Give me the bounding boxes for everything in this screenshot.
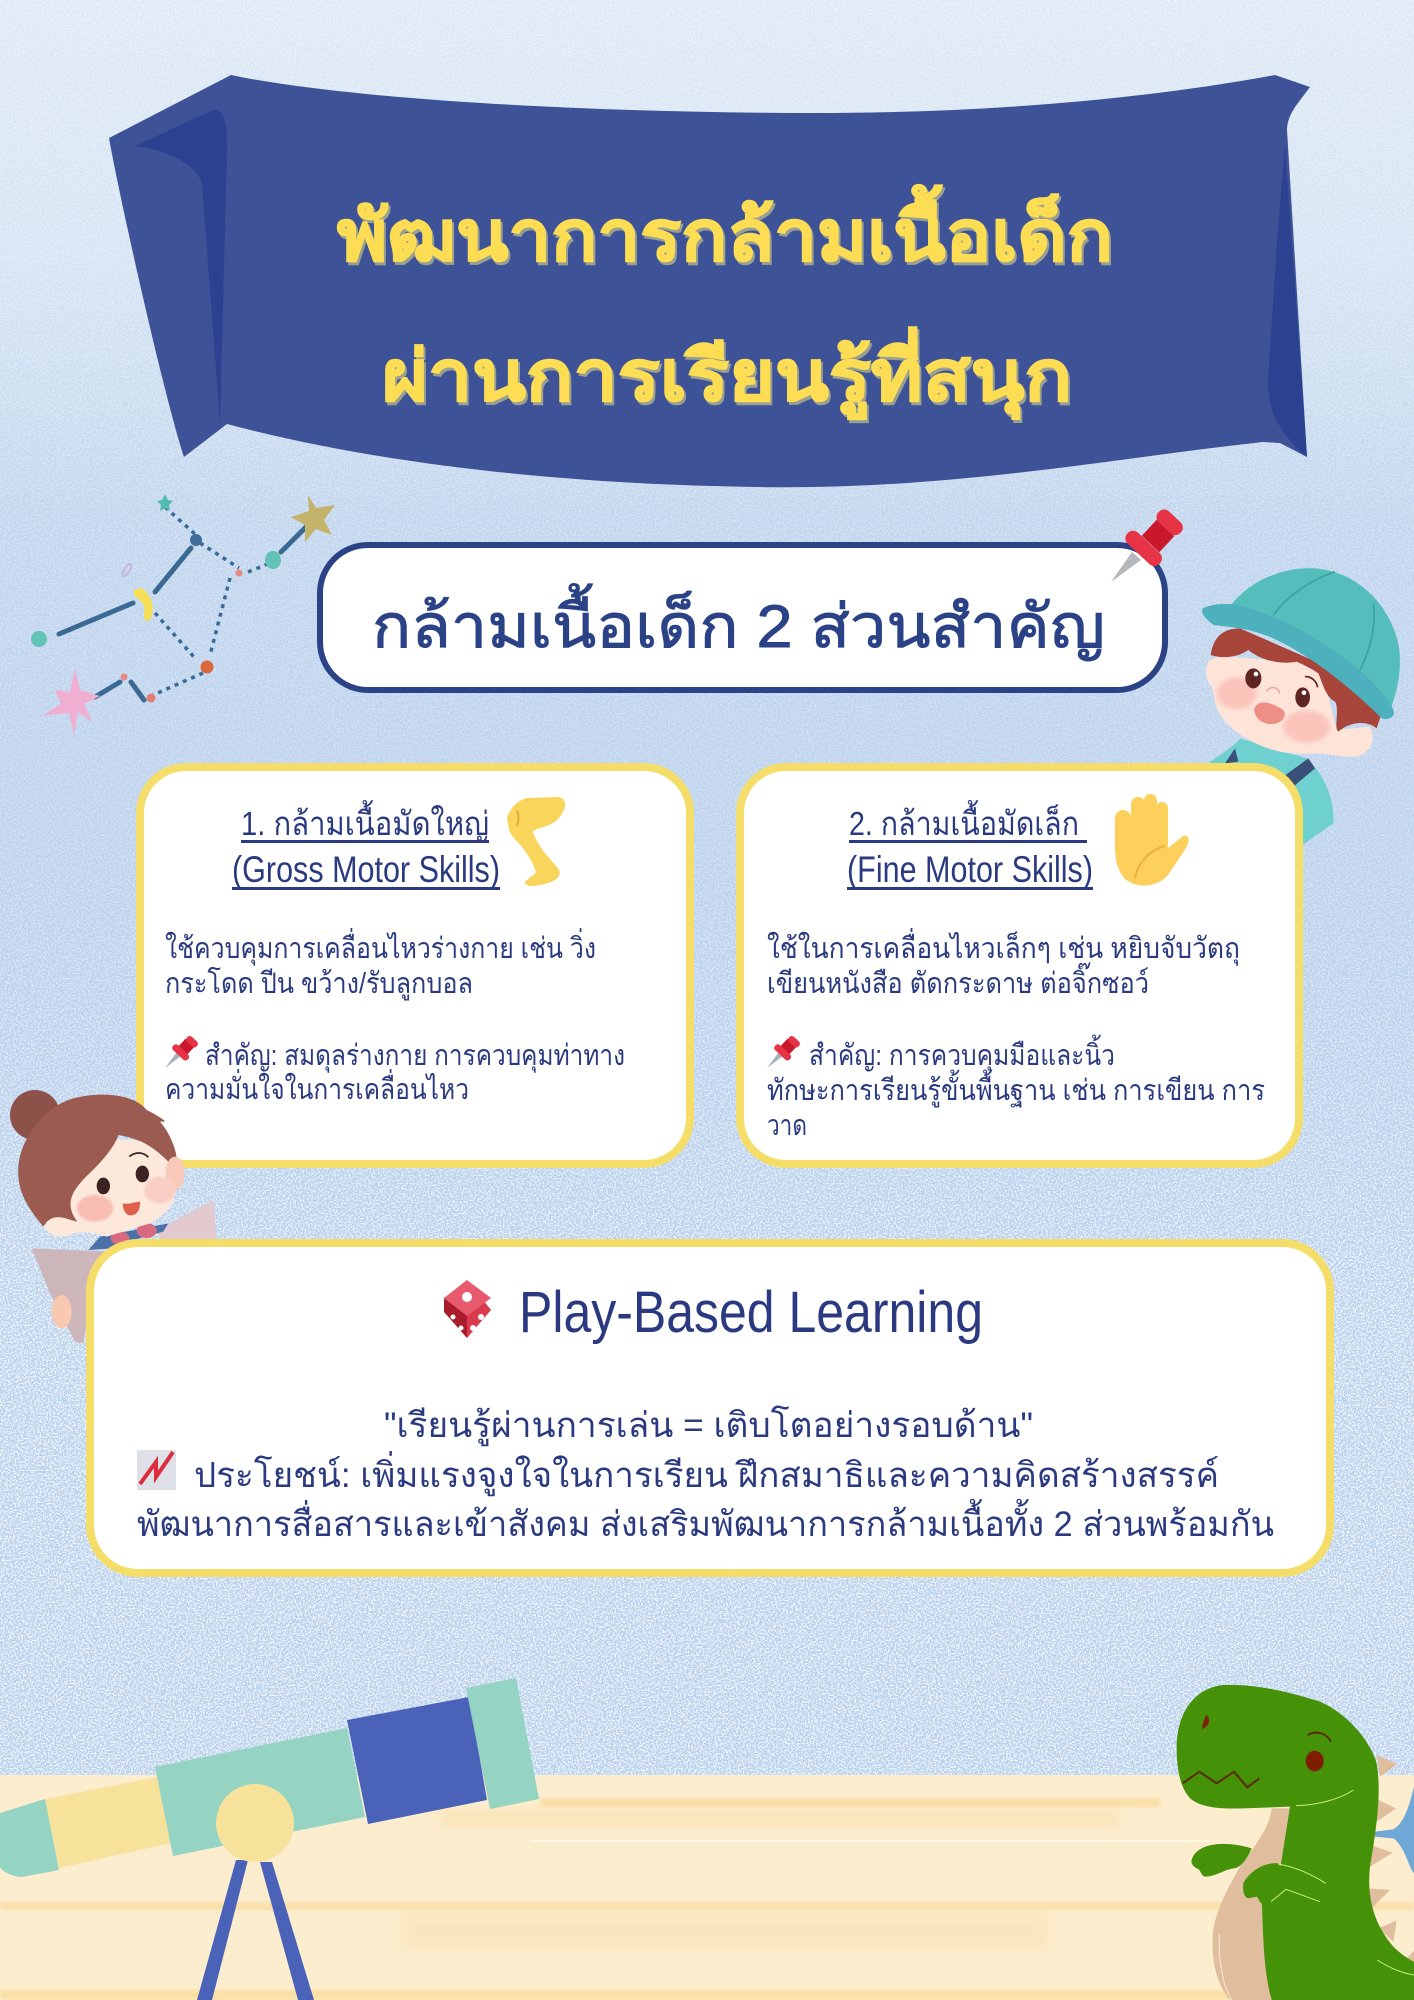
panel: gross motor skills bbox=[140, 767, 690, 1164]
title text: ผ่านการเรียนรู้ที่สนุก bbox=[382, 328, 1072, 419]
character: green dinosaur bbox=[1177, 1685, 1414, 2000]
icon: leg bbox=[507, 797, 565, 886]
icon: dice bbox=[444, 1280, 491, 1338]
character: boy with helmet bbox=[1202, 568, 1400, 850]
body text: fine motor: เขียนหนังสือ ตัดกระดาษ ต่อจิ๊กซอว์ bbox=[767, 962, 1149, 1000]
constellation bbox=[31, 494, 335, 735]
heading: fine motor: 2. กล้ามเนื้อมัดเล็ก bbox=[849, 800, 1079, 842]
wooden floor bbox=[0, 1775, 1414, 2000]
importance text: gross motor: สำคัญ: สมดุลร่างกาย การควบคุมท่าทาง bbox=[205, 1040, 625, 1073]
importance text: gross motor: ความมั่นใจในการเคลื่อนไหว bbox=[165, 1069, 469, 1106]
benefit text: พัฒนาการสื่อสารและเข้าสังคม ส่งเสริมพัฒนาการกล้ามเนื้อทั้ง 2 ส่วนพร้อมกัน bbox=[137, 1498, 1274, 1544]
subtitle text: กล้ามเนื้อเด็ก 2 ส่วนสำคัญ bbox=[372, 583, 1105, 661]
heading: gross motor bbox=[232, 800, 500, 890]
importance text: fine motor: ทักษะการเรียนรู้ขั้นพื้นฐาน เช่น การเขียน การ bbox=[767, 1069, 1265, 1108]
benefit text bbox=[137, 1451, 1274, 1544]
heading: fine motor bbox=[847, 800, 1093, 890]
body text: fine motor bbox=[767, 928, 1240, 1000]
importance text: fine motor bbox=[767, 1034, 1265, 1142]
importance text: fine motor: วาด bbox=[767, 1110, 807, 1142]
icon: red push pin bbox=[1111, 507, 1186, 582]
icon: chart bbox=[137, 1450, 176, 1490]
subtitle box bbox=[320, 545, 1165, 690]
heading: fine motor: (Fine Motor Skills) bbox=[847, 849, 1093, 890]
heading: play-based learning: Play-Based Learning bbox=[519, 1280, 983, 1345]
body text: gross motor: ใช้ควบคุมการเคลื่อนไหวร่างกาย เช่น วิ่ง bbox=[165, 928, 596, 966]
body text: gross motor: กระโดด ปีน ขว้าง/รับลูกบอล bbox=[165, 966, 473, 1001]
importance text: gross motor bbox=[165, 1040, 625, 1106]
body text: gross motor bbox=[165, 928, 596, 1001]
character: girl with hair bun bbox=[10, 1090, 217, 1343]
panel: play-based learning bbox=[90, 1243, 1330, 1573]
heading: gross motor: 1. กล้ามเนื้อมัดใหญ่ bbox=[241, 800, 489, 842]
icon: raised hand bbox=[1115, 794, 1189, 886]
body text: fine motor: ใช้ในการเคลื่อนไหวเล็กๆ เช่น หยิบจับวัตถุ bbox=[767, 928, 1240, 966]
panel: fine motor skills bbox=[740, 767, 1299, 1164]
title text bbox=[337, 185, 1113, 419]
heading: gross motor: (Gross Motor Skills) bbox=[232, 849, 500, 890]
title text: พัฒนาการกล้ามเนื้อเด็ก bbox=[337, 185, 1113, 275]
quote: "เรียนรู้ผ่านการเล่น = เติบโตอย่างรอบด้าน" bbox=[384, 1405, 1033, 1446]
title banner bbox=[109, 75, 1310, 487]
icon: pin bbox=[767, 1035, 801, 1068]
benefit text: ประโยชน์: เพิ่มแรงจูงใจในการเรียน ฝึกสมาธิและความคิดสร้างสรรค์ bbox=[194, 1451, 1219, 1496]
telescope bbox=[0, 1678, 539, 2000]
icon: pin bbox=[165, 1035, 199, 1068]
importance text: fine motor: สำคัญ: การควบคุมมือและนิ้ว bbox=[809, 1034, 1115, 1073]
